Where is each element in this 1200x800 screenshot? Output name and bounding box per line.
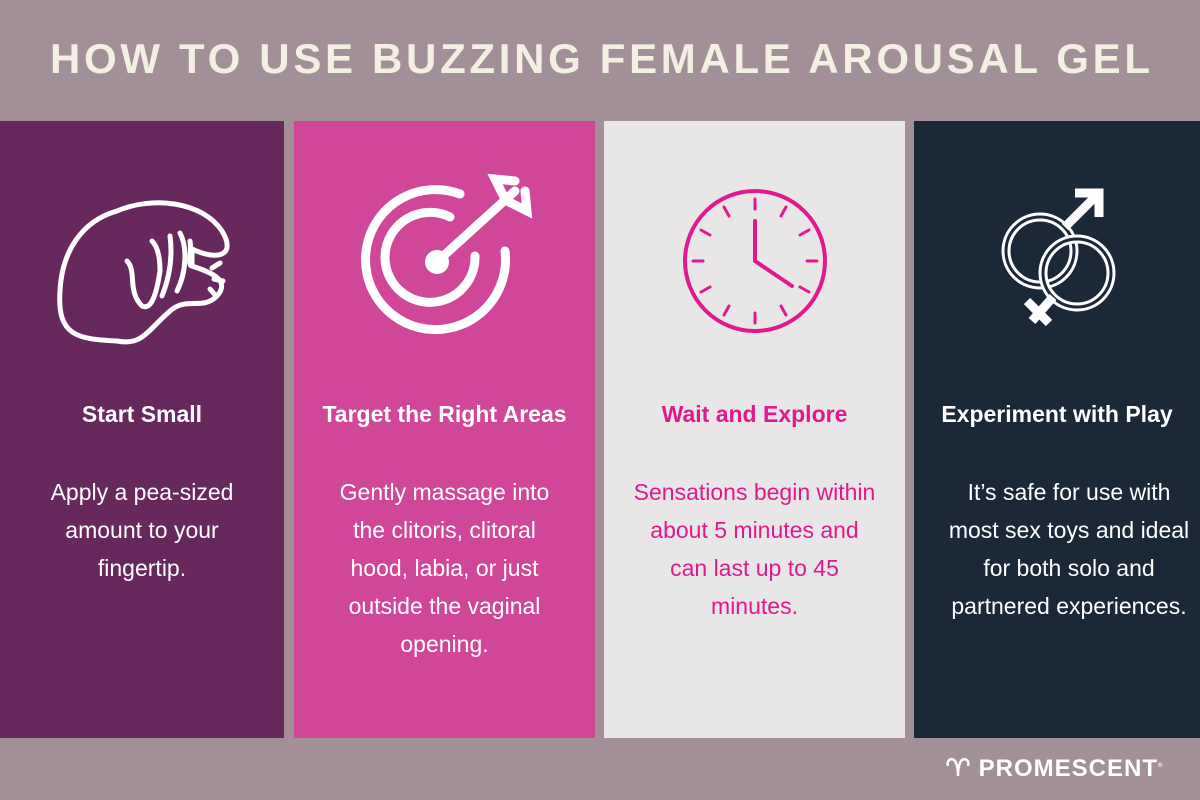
heading: Wait and Explore [662, 401, 847, 427]
text [50, 479, 233, 581]
panel: experiment [914, 121, 1200, 738]
text: partnered experiences. [951, 593, 1187, 619]
text: hood, labia, or just [351, 555, 538, 581]
heading: Experiment with Play [941, 401, 1173, 427]
heading: Start Small [82, 401, 202, 427]
text: fingertip. [98, 555, 186, 581]
text: for both solo and [983, 555, 1155, 581]
text: Apply a pea-sized [51, 479, 233, 505]
panel: start small [0, 121, 284, 738]
icon: gender symbols [1002, 188, 1116, 326]
text: It’s safe for use with [968, 479, 1170, 505]
text: Gently massage into [340, 479, 549, 505]
panel: wait [604, 121, 905, 738]
text: minutes. [711, 593, 798, 619]
text [340, 479, 549, 657]
icon: clock [683, 189, 827, 333]
icon: target [361, 174, 532, 334]
text: Sensations begin within [634, 479, 875, 505]
logo: PROMESCENT® [979, 755, 1163, 782]
heading: Target the Right Areas [322, 401, 567, 427]
text [949, 479, 1189, 619]
text: amount to your [65, 517, 219, 543]
panel: target [294, 121, 595, 738]
icon: fingertip [57, 200, 230, 344]
text [634, 479, 875, 619]
text: opening. [400, 631, 489, 657]
title: HOW TO USE BUZZING FEMALE AROUSAL GEL [50, 35, 1150, 82]
text: about 5 minutes and [650, 517, 859, 543]
text: most sex toys and ideal [949, 517, 1189, 543]
text: can last up to 45 [670, 555, 839, 581]
text: the clitoris, clitoral [353, 517, 536, 543]
text: outside the vaginal [349, 593, 540, 619]
